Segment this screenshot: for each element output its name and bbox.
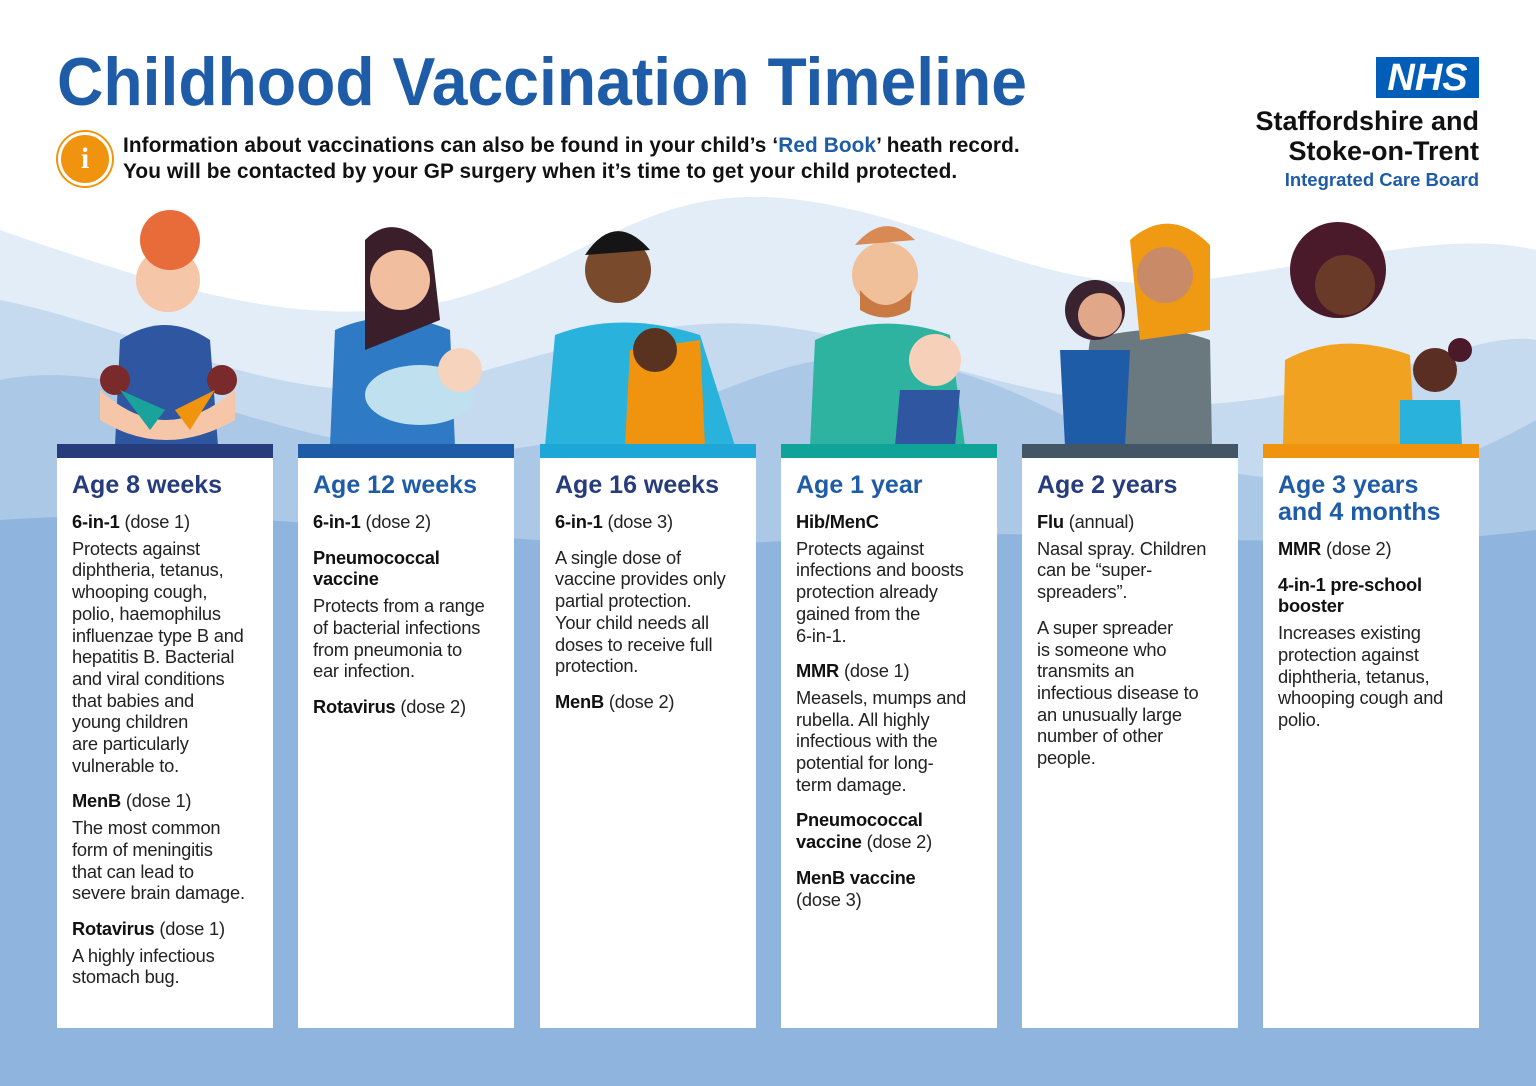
card: age 8 weeks: that babies and — [72, 690, 194, 711]
card: age 2 years: people. — [1037, 747, 1096, 768]
card: age 16 weeks: MenB (dose 2) — [555, 691, 674, 712]
info text — [123, 134, 1020, 183]
card: age 8 weeks: diphtheria, tetanus, — [72, 559, 224, 580]
card: age 1 year: MMR (dose 1) — [796, 660, 909, 681]
card: age 1 year: vaccine (dose 2) — [796, 831, 932, 852]
info text: Information about vaccinations can also be found in your child’s ‘Red Book’ heath record. — [123, 134, 1020, 157]
card: age 3 years and 4 months: 4-in-1 pre-school — [1278, 574, 1422, 595]
card: age 2 years: Nasal spray. Children — [1037, 538, 1206, 559]
card: age 2 years: Flu (annual) — [1037, 511, 1134, 532]
card: age 1 year: Hib/MenC — [796, 511, 879, 532]
card: age 1 year: term damage. — [796, 774, 906, 795]
card: age 8 weeks: MenB (dose 1) — [72, 790, 191, 811]
card: age 8 weeks: polio, haemophilus — [72, 603, 221, 624]
card: age 2 years: Age 2 years — [1037, 471, 1177, 499]
card: age 16 weeks: Your child needs all — [555, 612, 709, 633]
card: age 2 years: an unusually large — [1037, 704, 1182, 725]
NHS logo: Staffordshire and — [1255, 106, 1479, 136]
card: age 1 year — [781, 444, 997, 1028]
card: age 3 years and 4 months — [1263, 444, 1479, 1028]
info text: You will be contacted by your GP surgery when it’s time to get your child protected. — [123, 160, 957, 183]
card: age 8 weeks: Rotavirus (dose 1) — [72, 918, 225, 939]
card: age 8 weeks: influenzae type B and — [72, 625, 244, 646]
card: age 8 weeks: Age 8 weeks — [72, 471, 222, 499]
card: age 12 weeks: ear infection. — [313, 660, 415, 681]
card: age 2 years: spreaders”. — [1037, 581, 1127, 602]
card: age 2 years: A super spreader — [1037, 617, 1173, 638]
card: age 2 years: can be “super- — [1037, 559, 1152, 580]
card: age 16 weeks: vaccine provides only — [555, 568, 726, 589]
figure 6 — [1283, 222, 1472, 446]
card: age 2 years: is someone who — [1037, 639, 1166, 660]
NHS logo: Integrated Care Board — [1285, 169, 1479, 190]
card: age 8 weeks: Protects against — [72, 538, 200, 559]
figure 1 — [100, 210, 237, 446]
card: age 3 years and 4 months: and 4 months — [1278, 498, 1441, 526]
card: age 3 years and 4 months: Age 3 years — [1278, 471, 1418, 499]
card: age 8 weeks: whooping cough, — [72, 581, 207, 602]
card: age 12 weeks: Protects from a range — [313, 595, 485, 616]
card: age 12 weeks: Rotavirus (dose 2) — [313, 696, 466, 717]
card: age 1 year: Age 1 year — [796, 471, 922, 499]
card: age 8 weeks: hepatitis B. Bacterial — [72, 646, 234, 667]
card: age 2 years: number of other — [1037, 725, 1163, 746]
figure 3 — [545, 231, 735, 446]
card: age 8 weeks: vulnerable to. — [72, 755, 179, 776]
card: age 1 year: potential for long- — [796, 752, 933, 773]
figure 2 — [330, 227, 482, 446]
card: age 1 year: 6-in-1. — [796, 625, 846, 646]
card: age 1 year: Protects against — [796, 538, 924, 559]
card: age 2 years: infectious disease to — [1037, 682, 1198, 703]
card: age 16 weeks — [540, 444, 756, 1028]
card: age 1 year: protection already — [796, 581, 938, 602]
card: age 16 weeks: 6-in-1 (dose 3) — [555, 511, 673, 532]
card: age 12 weeks: 6-in-1 (dose 2) — [313, 511, 431, 532]
card: age 12 weeks: Pneumococcal — [313, 547, 440, 568]
card: age 8 weeks: form of meningitis — [72, 839, 213, 860]
card: age 8 weeks: A highly infectious — [72, 945, 215, 966]
card: age 12 weeks: of bacterial infections — [313, 617, 480, 638]
card: age 1 year: MenB vaccine — [796, 867, 916, 888]
card: age 3 years and 4 months: booster — [1278, 595, 1344, 616]
card: age 1 year: (dose 3) — [796, 889, 861, 910]
NHS logo: Stoke-on-Trent — [1288, 136, 1479, 166]
card: age 3 years and 4 months: polio. — [1278, 709, 1321, 730]
NHS logo — [1255, 57, 1479, 190]
NHS logo: NHS — [1387, 57, 1468, 99]
card: age 3 years and 4 months: diphtheria, tetanus, — [1278, 666, 1430, 687]
card: age 1 year: Measels, mumps and — [796, 687, 966, 708]
card: age 16 weeks: protection. — [555, 655, 638, 676]
card: age 1 year: infectious with the — [796, 730, 938, 751]
card: age 16 weeks: doses to receive full — [555, 634, 712, 655]
illustrations: parents with children — [100, 210, 1472, 444]
card: age 1 year: Pneumococcal — [796, 809, 923, 830]
card: age 2 years: transmits an — [1037, 660, 1134, 681]
card: age 16 weeks: partial protection. — [555, 590, 691, 611]
card: age 8 weeks: severe brain damage. — [72, 882, 245, 903]
card: age 3 years and 4 months: MMR (dose 2) — [1278, 538, 1391, 559]
card: age 8 weeks: The most common — [72, 817, 220, 838]
figure 4 — [810, 226, 965, 446]
card: age 1 year: rubella. All highly — [796, 709, 929, 730]
card: age 12 weeks — [298, 444, 514, 1028]
card: age 8 weeks: stomach bug. — [72, 966, 179, 987]
card: age 3 years and 4 months: Increases existing — [1278, 622, 1421, 643]
icon: info: i — [81, 142, 89, 175]
card: age 8 weeks: that can lead to — [72, 861, 194, 882]
card: age 8 weeks: and viral conditions — [72, 668, 224, 689]
card: age 16 weeks: A single dose of — [555, 547, 681, 568]
card: age 12 weeks: Age 12 weeks — [313, 471, 477, 499]
card: age 16 weeks: Age 16 weeks — [555, 471, 719, 499]
card: age 8 weeks: 6-in-1 (dose 1) — [72, 511, 190, 532]
card: age 1 year: infections and boosts — [796, 559, 964, 580]
card: age 12 weeks: from pneumonia to — [313, 639, 462, 660]
figure 5 — [1060, 224, 1212, 446]
card: age 8 weeks: young children — [72, 711, 188, 732]
card: age 2 years — [1022, 444, 1238, 1028]
icon: info — [58, 132, 112, 186]
card: age 1 year: gained from the — [796, 603, 920, 624]
card: age 8 weeks — [57, 444, 273, 1028]
card: age 12 weeks: vaccine — [313, 568, 379, 589]
card: age 3 years and 4 months: whooping cough and — [1278, 687, 1443, 708]
card: age 8 weeks: are particularly — [72, 733, 189, 754]
card: age 3 years and 4 months: protection against — [1278, 644, 1419, 665]
